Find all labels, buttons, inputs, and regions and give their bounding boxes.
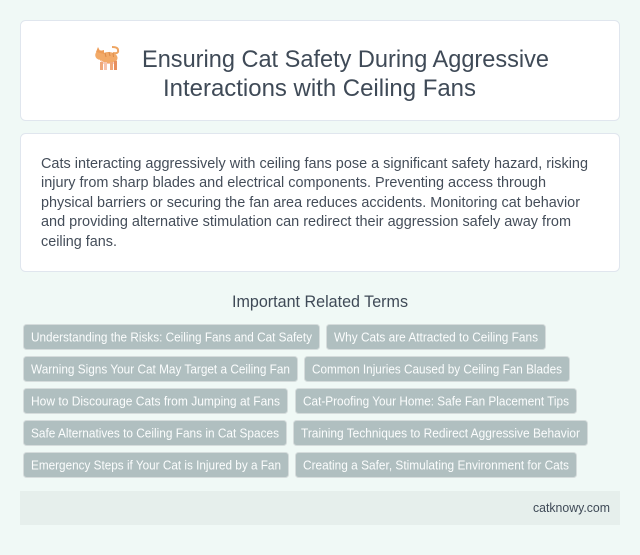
footer text: catknowy.com [533,500,610,515]
text block: description: and providing alternative stimulation can redirect their aggression safely away from [41,214,571,230]
tag [24,420,286,446]
panel: title card [20,20,620,120]
tag [24,324,320,350]
footer bar [20,491,620,525]
tag [296,388,576,414]
icon: cat [95,47,118,70]
title [142,46,549,102]
tag group: related terms [24,324,588,478]
tag: Creating a Safer, Stimulating Environment for Cats [303,458,569,472]
tag [294,420,588,446]
text block: description: Cats interacting aggressively with ceiling fans pose a significant safety hazard, risking [41,156,588,172]
tag: Common Injuries Caused by Ceiling Fan Blades [312,362,562,376]
title: Interactions with Ceiling Fans [163,75,476,102]
text block: description: ceiling fans. [41,234,117,250]
text block: description: physical barriers or securing the fan area reduces accidents. Monitoring cat behavior [41,195,580,211]
heading: related terms: Important Related Terms [232,293,408,311]
tag [24,388,288,414]
tag [326,324,546,350]
tag: Why Cats are Attracted to Ceiling Fans [334,330,538,344]
tag: Warning Signs Your Cat May Target a Ceiling Fan [31,362,290,376]
panel: description [20,134,620,272]
tag: Cat-Proofing Your Home: Safe Fan Placement Tips [303,394,569,408]
tag [24,356,298,382]
tag: Understanding the Risks: Ceiling Fans and Cat Safety [31,330,313,344]
tag: Emergency Steps if Your Cat is Injured by a Fan [31,458,281,472]
text block: description [41,156,588,250]
tag [304,356,570,382]
tag: Safe Alternatives to Ceiling Fans in Cat Spaces [31,426,279,440]
tag: Training Techniques to Redirect Aggressive Behavior [301,426,580,440]
tag: How to Discourage Cats from Jumping at Fans [31,394,280,408]
tag [296,452,576,478]
tag [24,452,288,478]
title: Ensuring Cat Safety During Aggressive [142,46,549,73]
text block: description: injury from sharp blades and electrical components. Preventing access through [41,175,546,191]
